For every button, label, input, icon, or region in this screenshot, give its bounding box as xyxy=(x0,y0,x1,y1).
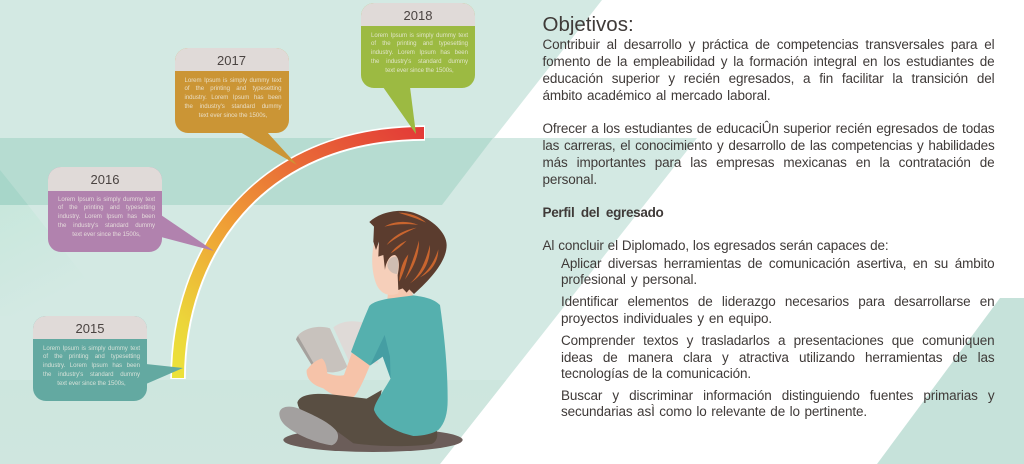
background: bottom right shape xyxy=(877,298,1024,464)
t-shirt xyxy=(351,295,448,436)
background: light teal field xyxy=(0,0,697,464)
ear xyxy=(387,257,398,274)
text 2015: the industry's standard dummy xyxy=(43,371,140,378)
text 2018: text ever since the 1500s, xyxy=(385,66,454,74)
year 2015 xyxy=(33,316,147,339)
list item: comprender: ideas de manera clara y atractiva utilizando herramientas de las xyxy=(561,350,994,365)
trousers xyxy=(297,390,437,446)
pointer 2018 xyxy=(384,88,416,134)
text 2017: the industry's standard dummy xyxy=(184,103,282,110)
paragraph: contribuir xyxy=(542,37,994,103)
hair xyxy=(369,211,447,294)
paragraph: contribuir: Contribuir al desarrollo y práctica de competencias transversales para el xyxy=(542,37,994,52)
neck xyxy=(378,277,413,299)
text 2015: industry. Lorem Ipsum has been xyxy=(43,362,140,369)
background: darker horizontal band xyxy=(0,138,493,205)
text 2015: of the printing and typesetting xyxy=(43,353,140,360)
paragraph: contribuir: educación superior y recién egresados, a fin facilitar la transición del xyxy=(542,71,994,86)
list item: identificar xyxy=(561,294,994,326)
paragraph: contribuir: ámbito académico al mercado laboral. xyxy=(542,88,770,103)
year 2016 xyxy=(48,167,162,191)
list item: comprender: Comprender textos y trasladarlos a presentaciones que comuniquen xyxy=(561,333,994,348)
text 2017 xyxy=(184,76,282,118)
text 2017: industry. Lorem Ipsum has been xyxy=(184,94,282,101)
text 2018 xyxy=(371,32,468,74)
bubble: 2017 xyxy=(175,48,297,165)
paragraph: ofrecer: personal. xyxy=(542,172,597,187)
list item: buscar xyxy=(561,388,995,419)
text 2017: Lorem Ipsum is simply dummy text xyxy=(184,76,282,84)
pointer 2015 xyxy=(147,364,183,384)
text 2017: of the printing and typesetting xyxy=(184,85,282,92)
list item: buscar: secundarias asÌ como lo relevante de lo pertinente. xyxy=(561,404,867,419)
book right page xyxy=(333,321,378,363)
illustration: boy reading a book xyxy=(279,211,463,452)
year 2018: 2018 xyxy=(404,8,432,23)
bubble: 2015 xyxy=(33,316,183,401)
text 2016: Lorem Ipsum is simply dummy text xyxy=(58,196,155,202)
subheading: perfil del egresado: Perfil del egresado xyxy=(542,205,664,220)
paragraph: ofrecer xyxy=(542,120,994,187)
list item: comprender xyxy=(561,333,994,381)
paragraph: contribuir: fomento de la empleabilidad y la formación integral en los estudiantes de xyxy=(542,54,994,69)
text 2016: industry. Lorem Ipsum has been xyxy=(58,213,155,220)
year 2017 xyxy=(174,48,288,71)
text 2015: text ever since the 1500s, xyxy=(57,380,126,386)
arm and hand xyxy=(307,352,370,398)
text 2018: Lorem Ipsum is simply dummy text xyxy=(371,32,468,38)
year 2018 xyxy=(361,3,475,26)
text 2015 xyxy=(43,344,140,386)
list item: aplicar xyxy=(561,256,994,287)
text 2018: the industry's standard dummy xyxy=(371,58,468,65)
text 2016 xyxy=(58,196,155,238)
text 2018: industry. Lorem Ipsum has been xyxy=(371,49,468,56)
shoe xyxy=(279,407,338,445)
bubble: 2018 xyxy=(361,3,475,134)
year 2016: 2016 xyxy=(91,172,119,187)
book left page xyxy=(296,327,347,372)
t-shirt shadow xyxy=(370,335,391,379)
text 2016: of the printing and typesetting xyxy=(58,204,155,211)
paragraph: al concluir: Al concluir el Diplomado, los egresados serán capaces de: xyxy=(542,238,888,253)
heading: Objetivos: Objetivos: xyxy=(542,13,634,36)
bubble: 2016 xyxy=(48,167,214,252)
text 2015: Lorem Ipsum is simply dummy text xyxy=(43,344,140,352)
timeline arc xyxy=(178,133,425,379)
pointer 2016 xyxy=(162,216,214,251)
text 2016: text ever since the 1500s, xyxy=(72,230,141,238)
year 2017: 2017 xyxy=(217,53,246,68)
text 2017: text ever since the 1500s, xyxy=(199,112,267,118)
hair highlights xyxy=(384,213,438,283)
background: floor xyxy=(440,380,506,464)
list item: aplicar: Aplicar diversas herramientas de comunicación asertiva, en su ámbito xyxy=(561,256,994,271)
paragraph: ofrecer: Ofrecer a los estudiantes de educaciÛn superior recién egresados de todas xyxy=(542,121,994,136)
paragraph: ofrecer: las carreras, el conocimiento y desarrollo de las competencias y habilidades xyxy=(542,138,994,153)
paragraph: ofrecer: más importantes para las empresas mexicanas en la contratación de xyxy=(542,155,994,170)
year 2015: 2015 xyxy=(76,321,104,336)
face xyxy=(372,243,403,295)
text 2018: of the printing and typesetting xyxy=(371,40,468,47)
list item: identificar: Identificar elementos de liderazgo necesarios para desarrollarse en xyxy=(561,294,994,309)
book edge xyxy=(296,336,314,367)
background: left lower facet xyxy=(0,205,115,316)
floor shadow xyxy=(283,428,463,452)
list item: comprender: tecnologías de la comunicación. xyxy=(561,366,751,381)
list item: identificar: proyectos individuales y en equipo. xyxy=(561,311,772,326)
list item: buscar: Buscar y discriminar información distinguiendo fuentes primarias y xyxy=(561,388,994,403)
background: left facet triangle xyxy=(0,170,28,205)
pointer 2017 xyxy=(242,133,297,165)
text 2016: the industry's standard dummy xyxy=(58,222,155,229)
list item: aplicar: profesional y personal. xyxy=(561,272,697,287)
